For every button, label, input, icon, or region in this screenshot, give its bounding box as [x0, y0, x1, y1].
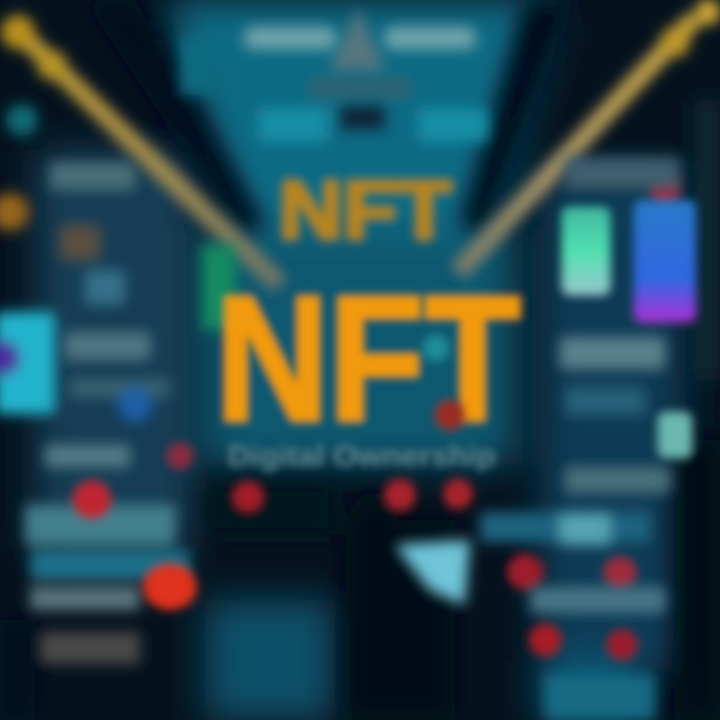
right colour screens: [562, 200, 696, 458]
green accent by main title: [202, 245, 236, 330]
small NFT heading: NFT: [279, 165, 451, 256]
subtitle under main heading: Digital Ownership: [228, 440, 496, 473]
left icons: [0, 104, 55, 414]
gold beam left: [1, 15, 280, 285]
red lights: [73, 175, 680, 660]
left column panels: [25, 162, 190, 664]
main NFT heading: NFT: [216, 259, 520, 458]
teal spot on main heading: [423, 335, 465, 430]
light blue foreground shard: [395, 540, 470, 605]
gold beam right: [458, 0, 720, 272]
right column panels: [480, 157, 680, 720]
ceiling banner: [180, 8, 488, 142]
